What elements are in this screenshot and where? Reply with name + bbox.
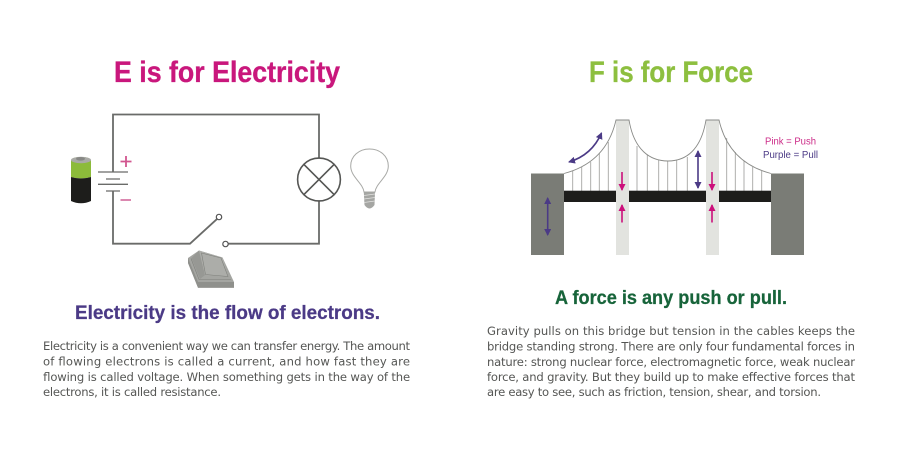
body text: force: are easy to see, such as friction, tension, shear, and torsion. — [487, 385, 821, 399]
plus sign — [120, 156, 132, 167]
icon: light bulb — [351, 149, 388, 208]
arrows: pull — [548, 133, 698, 235]
arrows: push — [622, 172, 712, 222]
body text: electricity: Electricity is a convenient way we can transfer energy. The amount — [43, 339, 410, 353]
title: E is for Electricity: E is for Electricity — [114, 56, 341, 89]
panel: force — [487, 56, 855, 399]
body text: electricity: flowing is called voltage. When something gets in the way of the — [43, 370, 410, 384]
anchor blocks — [531, 174, 804, 255]
body text: force: force, and gravity. But they build up to make effective forces that — [487, 370, 855, 384]
body text: force — [487, 324, 855, 399]
icon: rocker switch — [188, 250, 234, 288]
minus sign — [120, 199, 131, 201]
battery symbol plates — [98, 172, 128, 191]
suspension cables — [564, 120, 771, 174]
subtitle: electricity: Electricity is the flow of electrons. — [75, 303, 380, 324]
circuit diagram — [98, 114, 340, 247]
legend — [763, 136, 818, 161]
switch contact: upper — [216, 214, 222, 220]
body text: electricity — [43, 339, 410, 399]
body text: electricity: of flowing electrons is called a current, and how fast they are — [43, 355, 410, 369]
bridge diagram — [531, 120, 818, 255]
panel: electricity — [43, 56, 410, 399]
body text: force: bridge standing strong. There are only four fundamental forces in — [487, 340, 855, 354]
legend: Purple = Pull — [763, 149, 818, 161]
body text: force: nature: strong nuclear force, electromagnetic force, weak nuclear — [487, 355, 855, 369]
body text: force: Gravity pulls on this bridge but tension in the cables keeps the — [487, 324, 855, 338]
body text: electricity: electrons, it is called resistance. — [43, 385, 221, 399]
lamp symbol — [298, 158, 340, 201]
switch contact: lower — [223, 241, 228, 247]
title: F is for Force: F is for Force — [589, 56, 753, 89]
legend: Pink = Push — [765, 136, 816, 148]
bridge deck — [564, 191, 771, 202]
bridge towers — [616, 120, 719, 255]
icon: battery — [71, 157, 91, 203]
subtitle: force: A force is any push or pull. — [555, 288, 787, 309]
bridge hangers — [573, 138, 762, 191]
circuit wires — [113, 114, 319, 244]
